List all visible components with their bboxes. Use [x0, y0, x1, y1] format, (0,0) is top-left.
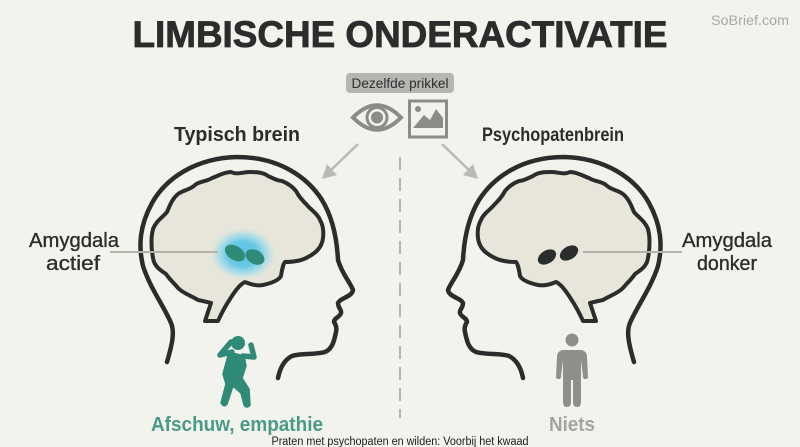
icon: recoiling person	[220, 336, 254, 407]
divider	[399, 157, 401, 418]
label: same stimulus	[346, 73, 454, 93]
label: amygdala dark: Amygdala	[682, 230, 773, 252]
label: amygdala active: actief	[46, 253, 100, 275]
pointer line: right	[583, 251, 682, 253]
head: typical brain	[140, 157, 353, 378]
arrow: to psychopath brain	[442, 144, 478, 179]
head: psychopath brain	[448, 157, 661, 378]
label: amygdala dark: donker	[697, 253, 757, 275]
arrow: to typical brain	[322, 144, 358, 179]
caption: disgust, empathy: Afschuw, empathie	[151, 414, 323, 436]
pointer line: left	[110, 251, 218, 253]
icon: picture	[410, 101, 446, 137]
head outline left	[140, 157, 353, 378]
watermark: SoBrief.com	[711, 13, 789, 28]
amygdala glow	[208, 226, 278, 282]
title: LIMBISCHE ONDERACTIVATIE	[132, 14, 668, 55]
brain right	[478, 172, 650, 321]
head outline right	[448, 157, 661, 378]
heading: psychopath brain: Psychopatenbrein	[482, 125, 624, 146]
amygdala dark	[535, 242, 581, 268]
amygdala active	[222, 241, 267, 268]
brain left	[152, 172, 323, 321]
icon: eye	[353, 105, 401, 130]
heading: typical brain: Typisch brein	[174, 124, 300, 146]
icon: neutral person	[556, 334, 588, 407]
caption: nothing: Niets	[549, 414, 595, 436]
label: same stimulus: Dezelfde prikkel	[352, 76, 448, 91]
label: amygdala active: Amygdala	[29, 230, 120, 252]
